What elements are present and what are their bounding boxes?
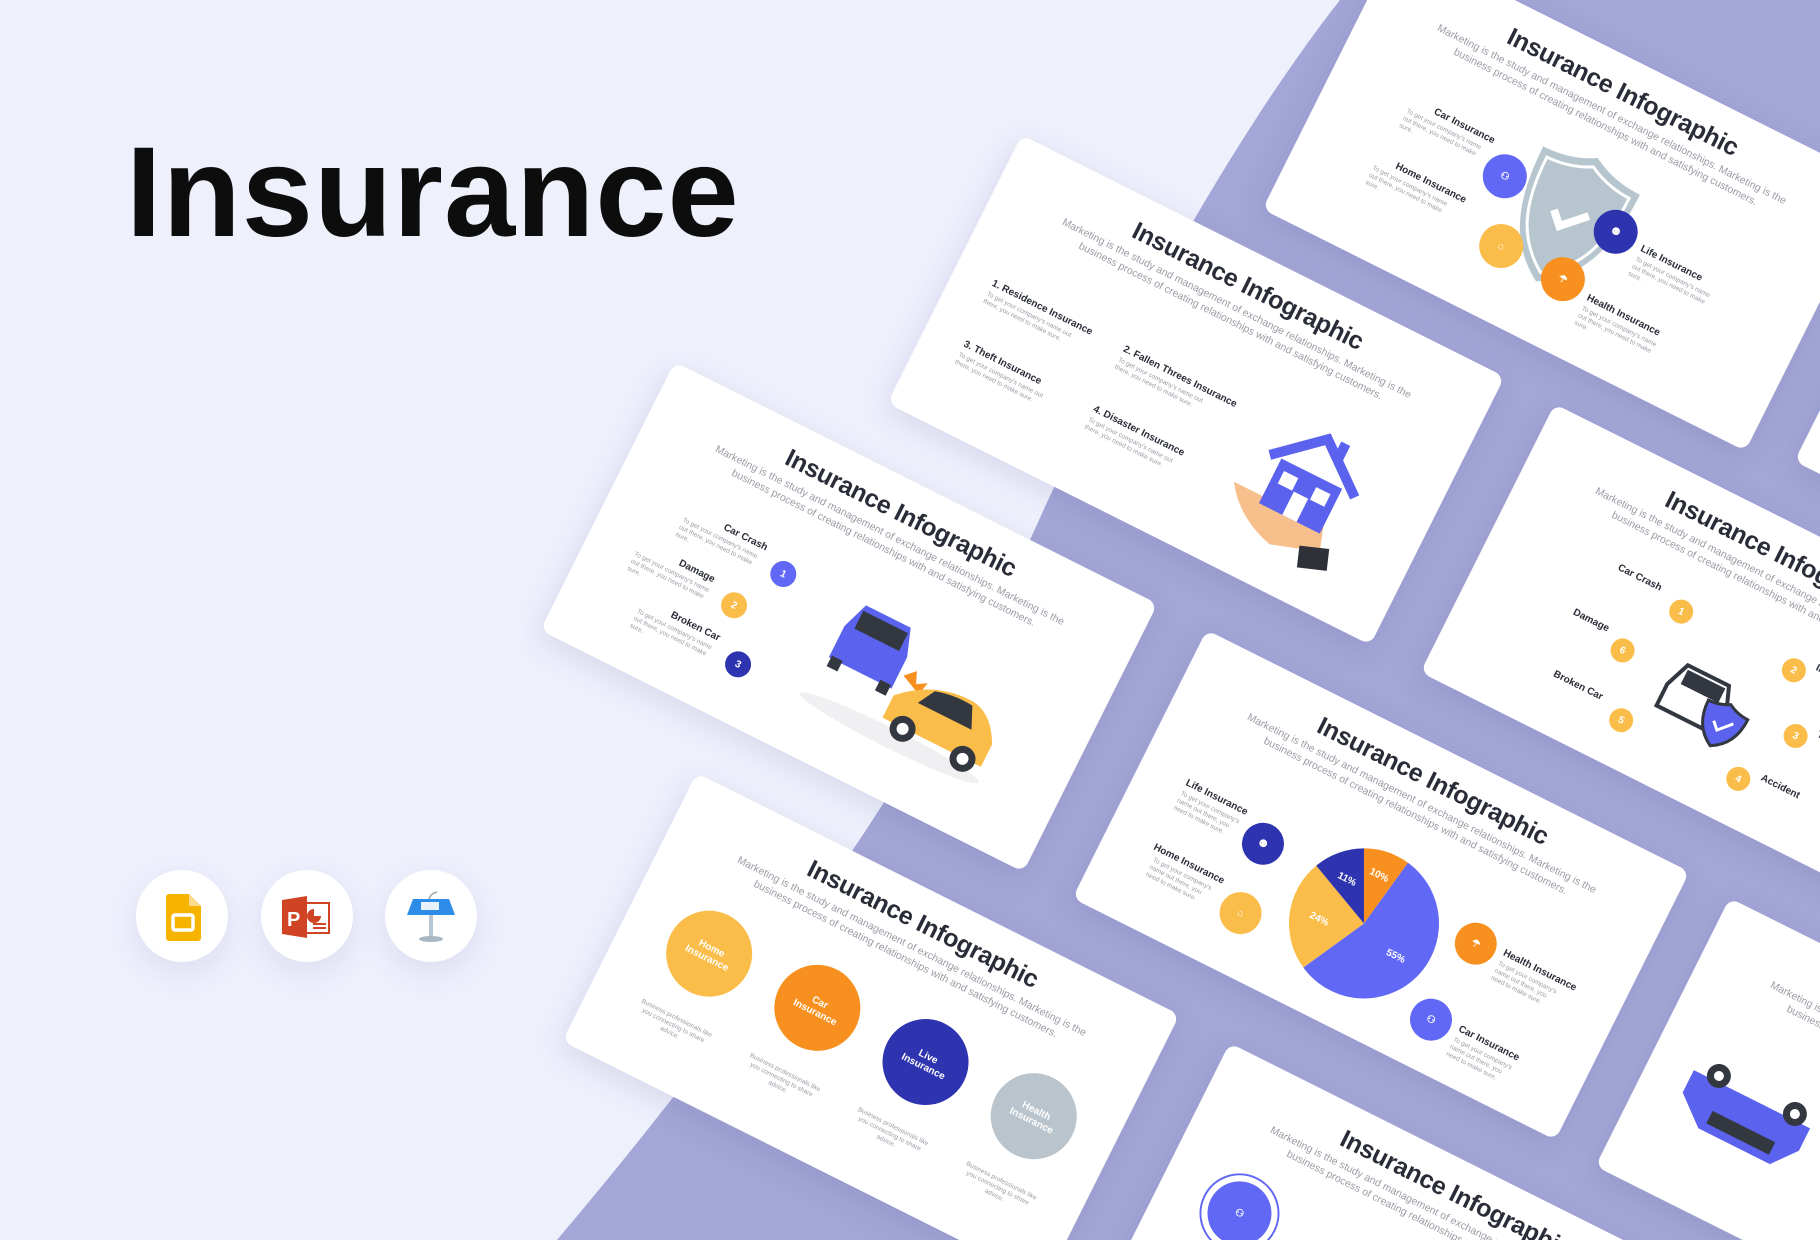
slide: house: 4. Disaster Insurance [1091, 404, 1186, 459]
slide: car crash: 1 [778, 568, 788, 580]
slide: house: 2. Fallen Threes Insurance [1121, 344, 1239, 410]
slide: car crash: 3 [733, 658, 743, 671]
icon: keynote [385, 870, 477, 962]
slide: car crash: Damage [677, 558, 717, 585]
slide: house: Marketing is the study and management of exchange relationships. Marketing is the business process of creating relationships with and satisfying customers. [1060, 216, 1413, 402]
slide: pie chart: ☂ [1469, 937, 1482, 951]
slide: house: To get your company's name out there, you need to make sure. [954, 351, 1044, 403]
slide: shield: To get your company's name out there, you need to make sure. [1364, 165, 1448, 214]
slide: circles: Business professionals like you connecting to share advice. [640, 998, 713, 1044]
slide: shield: ⚇ [1498, 169, 1511, 183]
slide: far right bottom [1595, 898, 1820, 1240]
slide: car crash: To get your company's name out there, you need to make sure. [626, 551, 710, 600]
slide: pie chart [1072, 630, 1690, 1140]
slide: shield: ☂ [1556, 272, 1569, 286]
slide: pie chart: To get your company's name out there, you need to make sure. [1172, 790, 1240, 836]
pie chart [1289, 848, 1439, 998]
slide: house: To get your company's name out there, you need to make sure. [1083, 416, 1174, 468]
slide: shield: To get your company's name out there, you need to make sure. [1627, 256, 1711, 306]
slide: shield: Home Insurance [1393, 161, 1468, 206]
icon: powerpoint: P [287, 909, 300, 931]
icon: powerpoint [261, 870, 353, 962]
slide: right car shield: Damage [1571, 607, 1611, 634]
slide: right car shield [1420, 404, 1820, 914]
slide: car crash: Insurance Infographic [781, 444, 1021, 583]
slide: pie chart: Life Insurance [1184, 778, 1249, 818]
car illustration [800, 605, 992, 784]
slide: circles: Live [917, 1048, 939, 1066]
slide: right car shield: 3 [1791, 730, 1801, 742]
slide: house [887, 135, 1505, 645]
slide: pie chart: ⚉ [1256, 837, 1269, 851]
slide: circles: Car [810, 994, 830, 1012]
slide: circles: Business professionals like you connecting to share advice. [965, 1160, 1038, 1207]
slide: right car shield: 2 [1789, 664, 1799, 676]
slide: right car shield: 6 [1618, 644, 1628, 657]
slide: car crash: 2 [729, 599, 739, 611]
icon: google slides [136, 870, 228, 962]
slide: house: To get your company's name out there, you need to make sure. [1113, 356, 1204, 408]
slide: pie chart: Home Insurance [1152, 842, 1226, 887]
slide: right car shield: Accident [1759, 773, 1802, 801]
slide: shield: Car Insurance [1432, 106, 1497, 146]
slide: bottom [1095, 1043, 1713, 1240]
slide: pie chart: ⌂ [1235, 907, 1246, 919]
slide: pie chart: Marketing is the study and management of exchange relationships. Marketing is the business process of creating relationships with and satisfying customers. [1245, 711, 1598, 897]
slide: pie chart: ⚇ [1425, 1013, 1437, 1027]
slide: right car shield: 4 [1733, 773, 1743, 785]
slide: house: To get your company's name out there, you need to make sure. [982, 291, 1072, 343]
car + shield icon [1654, 662, 1750, 748]
slide: circles: Health [1020, 1100, 1052, 1123]
slide: shield [1262, 0, 1820, 451]
slide: right car shield: 1 [1676, 605, 1686, 618]
slide: car crash: To get your company's name out there, you need to make sure. [674, 517, 759, 566]
slide: shield: To get your company's name out there, you need to make sure. [1398, 108, 1482, 157]
pie chart: 55% [1384, 947, 1407, 966]
main title: Insurance [126, 121, 740, 264]
slide: shield: Marketing is the study and management of exchange relationships. Marketing is the business process of creating relationships with and satisfying customers. [1435, 22, 1788, 208]
slide: house: 3. Theft Insurance [962, 339, 1043, 387]
slide: shield: Health Insurance [1585, 293, 1662, 339]
slide: circles: Insurance Infographic [803, 855, 1043, 994]
slide: shield: ⚉ [1609, 225, 1622, 239]
slide: pie chart: To get your company's name out there, you need to make sure. [1445, 1036, 1513, 1082]
slide: pie chart: To get your company's name out there, you need to make sure. [1144, 857, 1213, 902]
slide: circles [562, 773, 1180, 1240]
house in hand [1234, 433, 1360, 571]
slide: bottom: ⚇ [1233, 1206, 1246, 1220]
slide: car crash: Broken Car [669, 610, 722, 644]
upside-down car [1682, 1064, 1810, 1164]
slide: car crash: To get your company's name out there, you need to make sure. [629, 608, 713, 658]
slide: circles: Insurance [899, 1051, 947, 1082]
slide: car crash: Marketing is the study and management of exchange relationships. Marketing is the business process of creating relationships with and satisfying customers. [713, 443, 1066, 629]
slide: circles: Insurance [1008, 1106, 1055, 1137]
slide: shield: Life Insurance [1638, 243, 1704, 284]
pie chart: 10% [1368, 866, 1391, 885]
slide: pie chart: Health Insurance [1501, 948, 1578, 994]
slide: right car shield: 5 [1616, 714, 1626, 726]
shield [1520, 146, 1640, 282]
slide: house: 1. Residence Insurance [990, 278, 1094, 338]
slide: right car shield: Car Crash [1616, 562, 1664, 594]
slide: circles: Business professionals like you connecting to share advice. [857, 1106, 930, 1153]
slide: shield: Insurance Infographic [1503, 23, 1743, 162]
slide: shield: ⌂ [1496, 240, 1506, 252]
pie chart: 11% [1336, 870, 1358, 889]
slide: car crash: Car Crash [722, 522, 769, 553]
slide: house: Insurance Infographic [1128, 217, 1368, 356]
slide: pie chart: To get your company's name out there, you need to make sure. [1490, 960, 1558, 1006]
slide: circles: Insurance [791, 997, 838, 1028]
pie chart: 24% [1308, 910, 1331, 929]
slide: car crash [540, 362, 1158, 872]
slide: circles: Business professionals like you connecting to share advice. [748, 1052, 821, 1098]
slide: circles: Insurance [683, 943, 730, 974]
slide: shield: To get your company's name out there, you need to make sure. [1573, 305, 1658, 355]
slide: circles: Home [697, 938, 726, 960]
slide: far right top [1794, 193, 1820, 703]
slide: circles: Marketing is the study and management of exchange relationships. Marketing is the business process of creating relationships with and satisfying customers. [735, 854, 1088, 1040]
slide: pie chart: Car Insurance [1456, 1024, 1521, 1063]
slide: right car shield: Broken Car [1551, 669, 1605, 703]
slide: pie chart: Insurance Infographic [1313, 712, 1553, 851]
